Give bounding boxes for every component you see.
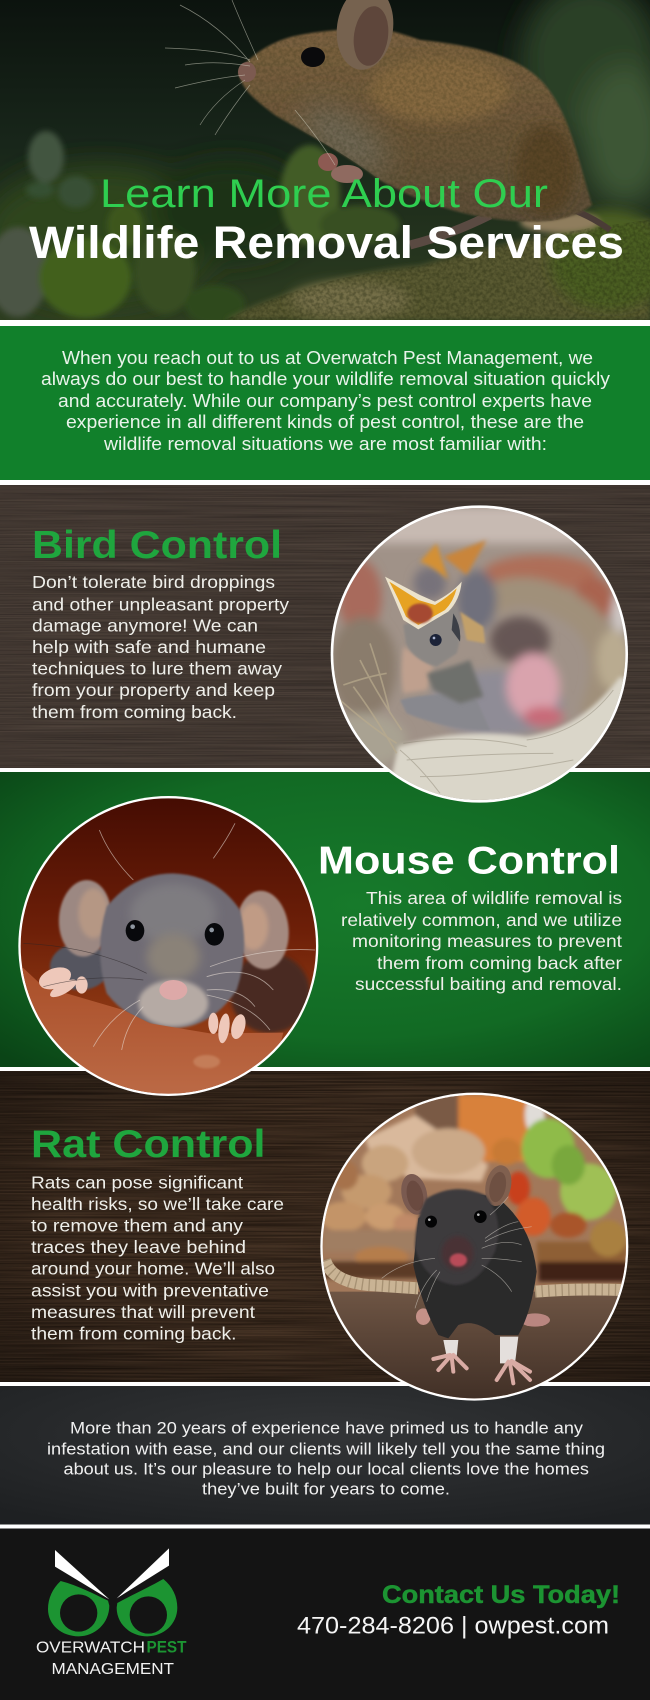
bird body text — [32, 572, 289, 722]
panel: intro — [0, 326, 650, 480]
rat body text: to remove them and any — [31, 1216, 243, 1236]
paws — [318, 153, 338, 171]
rat body text: around your home. We’ll also — [31, 1258, 275, 1278]
head — [415, 1189, 498, 1285]
rope — [325, 1260, 623, 1292]
intro text: wildlife removal situations we are most familiar with: — [103, 434, 547, 454]
bird body text: from your property and keep — [32, 680, 275, 700]
heading: rat control: Rat Control — [31, 1123, 266, 1166]
panel: mouse control — [0, 772, 650, 1067]
bird body text: them from coming back. — [32, 702, 237, 722]
back feet — [416, 1308, 431, 1325]
panel: rat control — [0, 1071, 650, 1382]
body — [413, 1195, 537, 1338]
ears — [57, 878, 110, 958]
eye — [430, 634, 442, 646]
ear — [336, 0, 394, 70]
panel: bird control — [0, 485, 650, 768]
bird body text: techniques to lure them away — [32, 658, 282, 678]
paws — [36, 963, 248, 1044]
logo: overwatch pest management: MANAGEMENT — [52, 1661, 174, 1678]
heading: mouse control: Mouse Control — [318, 840, 620, 882]
contact heading: Contact Us Today! — [382, 1581, 620, 1609]
intro text — [41, 348, 610, 454]
panel: hero — [0, 0, 650, 325]
closing text: infestation with ease, and our clients will likely tell you the same thing — [47, 1440, 605, 1458]
contact details: 470-284-8206 | owpest.com — [297, 1612, 609, 1640]
whiskers — [165, 0, 335, 165]
closing text — [47, 1418, 605, 1498]
rat body text: traces they leave behind — [31, 1237, 246, 1257]
table — [330, 1292, 620, 1398]
bird body text: Don’t tolerate bird droppings — [32, 572, 275, 592]
intro text: experience in all different kinds of pest control, these are the — [66, 412, 584, 432]
nest rim — [390, 676, 624, 800]
closing text: they’ve built for years to come. — [202, 1480, 450, 1498]
whiskers — [382, 1197, 532, 1308]
back beaks — [420, 543, 448, 580]
rat body text: measures that will prevent — [31, 1302, 255, 1322]
eye — [301, 47, 325, 67]
rock — [225, 220, 650, 320]
snout — [443, 1237, 473, 1270]
title: learn more: Learn More About Our — [100, 172, 548, 216]
ears — [401, 1174, 428, 1215]
panel: footer — [0, 1528, 650, 1700]
mouse body text: relatively common, and we utilize — [341, 910, 622, 930]
photo: bird nest — [330, 505, 628, 803]
logo: overwatch pest management: OVERWATCH — [36, 1640, 145, 1656]
bird body text: and other unpleasant property — [32, 594, 289, 614]
ledge — [22, 967, 284, 1094]
tail — [575, 211, 612, 232]
rat body text: them from coming back. — [31, 1324, 236, 1344]
chick body — [400, 695, 486, 728]
mouse body text: monitoring measures to prevent — [352, 931, 622, 951]
photo: rat in kitchen — [315, 1085, 635, 1405]
logo: overwatch pest management: PEST — [146, 1638, 186, 1656]
mouse body — [239, 28, 592, 222]
bird body text: damage anymore! We can — [32, 616, 258, 636]
whiskers — [93, 823, 315, 1050]
rat body text — [31, 1172, 284, 1344]
intro text: When you reach out to us at Overwatch Pest Management, we — [62, 348, 593, 368]
mouse body text: This area of wildlife removal is — [366, 888, 622, 908]
eyes — [126, 920, 144, 941]
intro text: always do our best to handle your wildlife removal situation quickly — [41, 369, 610, 389]
eyes — [425, 1216, 437, 1228]
straw — [340, 643, 402, 753]
logo: overwatch pest management — [36, 1548, 186, 1678]
mouse body text: them from coming back after — [377, 953, 622, 973]
panel: closing statement — [0, 1386, 650, 1524]
legs — [443, 1340, 458, 1357]
nose — [238, 62, 256, 82]
heading: bird control: Bird Control — [32, 524, 282, 567]
nose — [159, 980, 187, 1000]
rat body text: Rats can pose significant — [31, 1172, 243, 1192]
dark body shadow — [230, 953, 310, 1033]
closing text: about us. It’s our pleasure to help our local clients love the homes — [64, 1460, 589, 1478]
title: wildlife removal services: Wildlife Removal Services — [29, 217, 624, 268]
rat body text: health risks, so we’ll take care — [31, 1194, 284, 1214]
rat body text: assist you with preventative — [31, 1280, 269, 1300]
bird body text: help with safe and humane — [32, 637, 266, 657]
head — [100, 873, 244, 1027]
mouse body text: successful baiting and removal. — [355, 974, 622, 994]
photo: mouse on ledge — [18, 796, 318, 1096]
closing text: More than 20 years of experience have primed us to handle any — [70, 1418, 584, 1438]
open beak — [385, 577, 462, 629]
intro text: and accurately. While our company’s pest control experts have — [58, 391, 592, 411]
mouse body text — [341, 888, 622, 994]
